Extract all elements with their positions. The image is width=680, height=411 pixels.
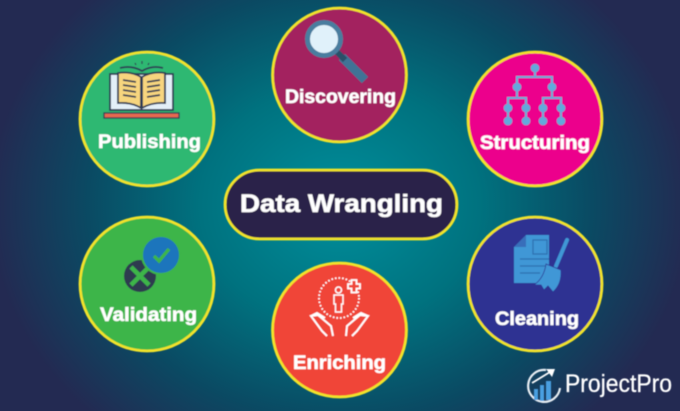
icon: magnifying glass: [308, 22, 365, 80]
icon: document and broom: [514, 235, 567, 292]
label: Publishing: Publishing: [98, 132, 201, 153]
icon: growth chart logo: [528, 369, 560, 402]
panel: Publishing: [80, 52, 214, 186]
panel: Structuring: [468, 52, 602, 186]
panel: Discovering: [272, 8, 406, 142]
panel: Validating: [80, 217, 214, 351]
icon: cross and check badges: [124, 235, 181, 292]
panel: Cleaning: [468, 217, 602, 351]
label: Enriching: Enriching: [293, 353, 386, 374]
panel: Enriching: [272, 263, 406, 397]
label: Structuring: Structuring: [480, 133, 590, 154]
icon: hands holding person: [311, 278, 368, 336]
heading: Data Wrangling: Data Wrangling: [240, 190, 443, 218]
label: Cleaning: Cleaning: [495, 309, 579, 330]
label: Validating: Validating: [100, 305, 197, 326]
brand name: ProjectPro: ProjectPro: [565, 370, 672, 398]
icon: open book: [104, 61, 179, 118]
logo: ProjectPro: [528, 369, 672, 402]
panel: Data Wrangling center pill: [225, 170, 457, 239]
label: Discovering: Discovering: [285, 87, 396, 108]
icon: hierarchy tree: [504, 64, 565, 125]
